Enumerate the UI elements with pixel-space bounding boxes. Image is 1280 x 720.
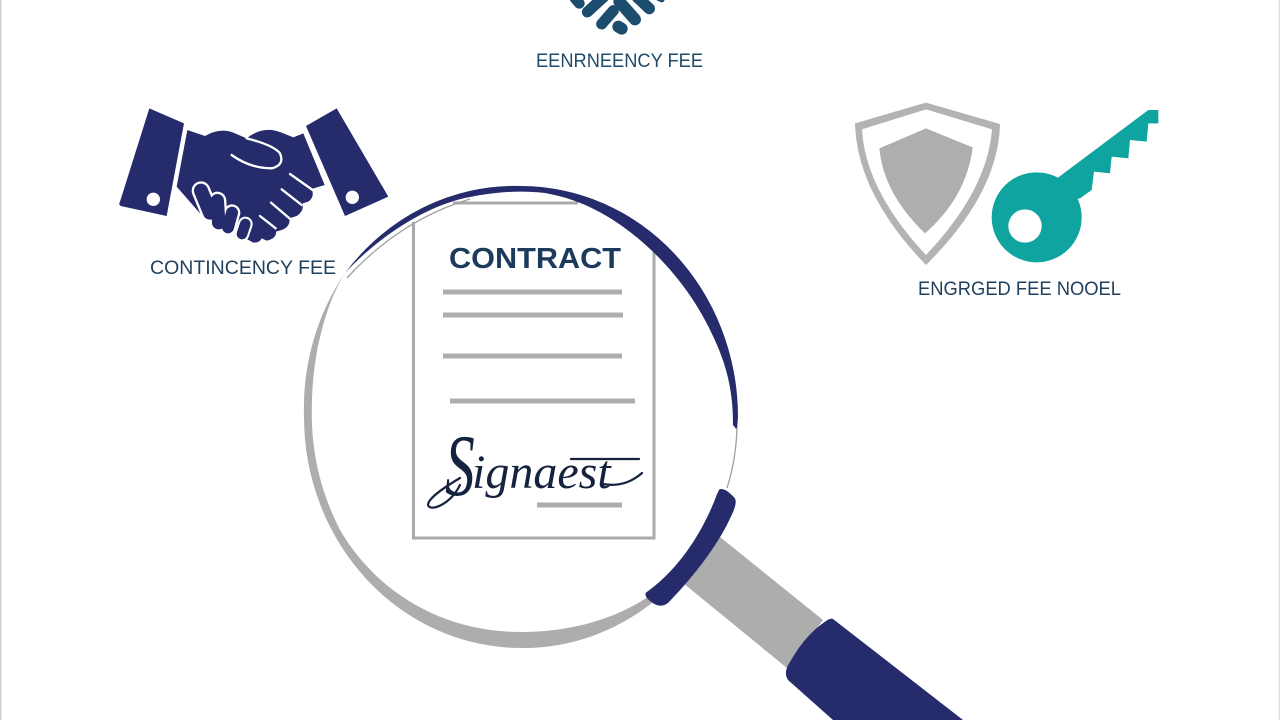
handle: grey shaft xyxy=(683,537,823,668)
icon: teal key xyxy=(992,110,1158,262)
left cuff xyxy=(119,108,184,216)
magnifying glass xyxy=(304,186,963,720)
contract document xyxy=(414,203,654,538)
signature xyxy=(428,418,642,515)
icon: navy handshake xyxy=(119,108,388,243)
clasped hands xyxy=(177,130,325,243)
handle: navy grip xyxy=(786,619,963,720)
icon: shield xyxy=(855,103,1000,265)
right cuff xyxy=(306,108,388,216)
signature: ignaest xyxy=(472,446,612,499)
icon: top handshake (cropped) xyxy=(575,0,662,29)
label: engaged fee model: ENGRGED FEE NOOEL xyxy=(918,279,1121,300)
label: contingency fee: CONTINCENCY FEE xyxy=(150,258,336,279)
lens rim: grey crescent xyxy=(304,273,652,648)
document title: CONTRACT xyxy=(449,243,621,275)
handle: navy collar xyxy=(645,489,736,606)
label: top fee: EENRNEENCY FEE xyxy=(536,51,703,72)
document outline xyxy=(414,203,654,538)
lens rim: navy arc xyxy=(345,186,738,430)
document text lines xyxy=(443,290,635,508)
signature: S xyxy=(445,418,475,515)
